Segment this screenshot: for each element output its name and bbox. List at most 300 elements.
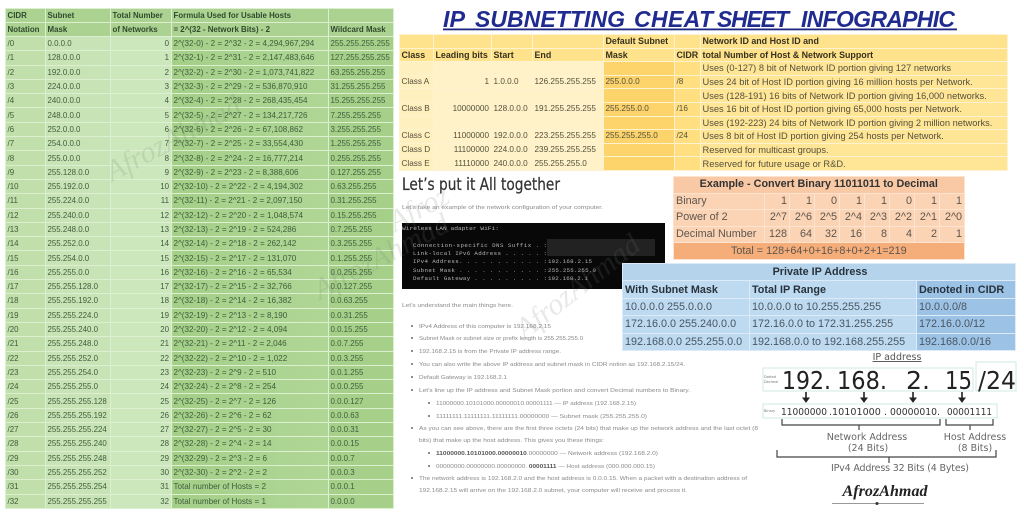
table: CIDR notation reference: Total Number — [112, 11, 163, 20]
table: CIDR notation reference: 0.0.63.255 — [330, 296, 368, 305]
table: CIDR notation reference: 31.255.255.255 — [330, 82, 385, 91]
table: CIDR notation reference: 8 — [165, 154, 169, 163]
table: CIDR notation reference: 3.255.255.255 — [330, 125, 381, 134]
table: CIDR notation reference: /9 — [8, 168, 14, 177]
table: binary to decimal example: Binary — [676, 195, 707, 207]
table: CIDR notation reference: 2^(32-8) - 2 = 2^24 - 2 = 16,777,214 — [174, 154, 303, 163]
table: CIDR notation reference: 0.31.255.255 — [330, 196, 377, 205]
table: binary to decimal example: 16 — [850, 228, 862, 240]
heading: Let’s put it All together — [402, 175, 560, 195]
table: CIDR notation reference: /25 — [8, 397, 18, 406]
table: CIDR notation reference: 0.0.0.0 — [330, 497, 355, 506]
table: IP address classes: Uses (192-223) 24 bits of Network ID portion giving 2 million networks. — [702, 118, 992, 128]
table: CIDR notation reference: /30 — [8, 468, 18, 477]
explanation list: Subnet Mask or subnet size or prefix length is 255.255.255.0 — [419, 336, 583, 342]
table: CIDR notation reference: /21 — [8, 339, 18, 348]
table: CIDR notation reference: of Networks — [112, 25, 158, 34]
table: CIDR notation reference: 0.0.7.255 — [330, 339, 363, 348]
table: CIDR notation reference: 15 — [160, 254, 169, 263]
table: binary to decimal example: 2^2 — [895, 211, 912, 223]
table: IP address classes: Class — [402, 50, 425, 60]
table: CIDR notation reference: 255.255.255.192 — [48, 411, 107, 420]
table: CIDR notation reference: 15.255.255.255 — [330, 96, 385, 105]
table: IP address classes: End — [534, 50, 551, 60]
table: IP address classes: Reserved for multicast groups. — [702, 145, 829, 155]
table: CIDR notation reference: Notation — [8, 25, 40, 34]
terminal: 192.168.2.1 — [548, 275, 589, 282]
table: binary to decimal example: 128 — [769, 228, 787, 240]
table: CIDR notation reference: 25 — [160, 397, 169, 406]
table: CIDR notation reference: /6 — [8, 125, 14, 134]
table: IP address classes: Uses 24 bit of Host ID portion giving 16 million hosts per Network. — [702, 77, 973, 87]
table: CIDR notation reference: 9 — [165, 168, 169, 177]
table: CIDR notation reference: 2^(32-28) - 2 = 2^4 - 2 = 14 — [174, 439, 272, 448]
explanation list: 11000000.10101000.00000010.00001111 — IP address (192.168.2.15) — [436, 401, 636, 407]
bracket labels: (24 Bits) — [848, 443, 888, 454]
table: IP address classes: /8 — [676, 77, 683, 86]
table: CIDR notation reference: 26 — [160, 411, 169, 420]
table: CIDR notation reference: 2^(32-11) - 2 = 2^21 - 2 = 2,097,150 — [174, 196, 302, 205]
table: binary to decimal example: 1 — [956, 195, 962, 207]
terminal: 192.168.2.15 — [548, 258, 593, 265]
table: IP address classes: Class B — [402, 104, 430, 113]
table: CIDR notation reference: 254.0.0.0 — [48, 139, 80, 148]
intro text: Let’s take an example of the network configuration of your computer. — [402, 205, 603, 211]
table: binary to decimal example: 1 — [781, 195, 787, 207]
table: CIDR notation reference: /8 — [8, 154, 14, 163]
table: binary to decimal example: Decimal Number — [676, 228, 756, 240]
table: CIDR notation reference: 255.255.254.0 — [48, 368, 98, 377]
explanation list: 11111111.11111111.11111111.00000000 — Subnet mask (255.255.255.0) — [436, 414, 647, 420]
table: binary to decimal example: Power of 2 — [676, 211, 728, 223]
explanation list: IPv4 Address of this computer is 192.168.2.15 — [419, 324, 551, 330]
table: CIDR notation reference: 2^(32-10) - 2 = 2^22 - 2 = 4,194,302 — [174, 182, 303, 191]
table: CIDR notation reference: 30 — [160, 468, 169, 477]
table: CIDR notation reference: 2^(32-9) - 2 = 2^23 - 2 = 8,388,606 — [174, 168, 299, 177]
binary IP row: 11000000 — [781, 407, 827, 418]
table: CIDR notation reference: 2^(32-0) - 2 = 2^32 - 2 = 4,294,967,294 — [174, 39, 314, 48]
table: CIDR notation reference: 0.0.0.127 — [330, 397, 363, 406]
table: CIDR notation reference: 1.255.255.255 — [330, 139, 381, 148]
table: CIDR notation reference: 255.255.248.0 — [48, 339, 98, 348]
table: CIDR notation reference: /24 — [8, 382, 18, 391]
table: private IP address: Private IP Address — [773, 266, 867, 278]
explanation list: 192.168.2.15 will arrive on the 192.168.2.0 subnet, your computer will receive and process it. — [419, 488, 687, 494]
table: private IP address: Total IP Range — [752, 284, 826, 296]
terminal: 255.255.255.0 — [548, 267, 597, 274]
table: binary to decimal example: 1 — [956, 228, 962, 240]
explanation list: 11000000.10101000.00000010 .00000000 — Network address (192.168.2.0) — [436, 451, 658, 457]
table: CIDR notation reference: 20 — [160, 325, 169, 334]
explanation list: You can also write the above IP address and subnet mask in CIDR notion as 192.168.2.15/24. — [419, 362, 685, 368]
table: IP address classes: 224.0.0.0 — [494, 145, 528, 154]
explanation list: bits) that make up the host address. This gives you these things: — [419, 438, 604, 444]
table: CIDR notation reference: 13 — [160, 225, 169, 234]
table: CIDR notation reference: 255.255.224.0 — [48, 311, 98, 320]
bracket labels — [827, 432, 1006, 474]
table: CIDR notation reference: 255.255.255.0 — [48, 382, 98, 391]
table: CIDR notation reference: 32 — [160, 497, 169, 506]
decimal IP row — [763, 352, 1016, 395]
table: CIDR notation reference: 255.192.0.0 — [48, 182, 89, 191]
table: CIDR notation reference: /5 — [8, 111, 14, 120]
table: CIDR notation reference: 252.0.0.0 — [48, 125, 80, 134]
table: private IP address: 192.168.0.0 255.255.0.0 — [625, 336, 742, 348]
table: CIDR notation reference: 7.255.255.255 — [330, 111, 381, 120]
table: IP address classes: Network ID and Host ID and — [702, 36, 819, 46]
table: CIDR notation reference: 21 — [160, 339, 169, 348]
arrows — [803, 392, 965, 402]
table: IP address classes: 11100000 — [454, 145, 489, 154]
table: CIDR notation reference: /29 — [8, 454, 18, 463]
table: CIDR notation reference: 0.127.255.255 — [330, 168, 381, 177]
table: binary to decimal example: 64 — [800, 228, 812, 240]
table: IP address classes: Leading bits — [436, 50, 488, 60]
table: IP address classes: 126.255.255.255 — [534, 77, 596, 86]
table: CIDR notation reference: 27 — [160, 425, 169, 434]
table: binary to decimal example: 32 — [825, 228, 837, 240]
table: CIDR notation reference: /11 — [8, 196, 18, 205]
table: CIDR notation reference: /27 — [8, 425, 18, 434]
table: private IP address: Denoted in CIDR — [919, 284, 1004, 296]
table: binary to decimal example: 2 — [931, 228, 937, 240]
table: binary to decimal example: 0 — [906, 195, 912, 207]
table: binary to decimal example: 2^3 — [870, 211, 887, 223]
table: CIDR notation reference: 255.248.0.0 — [48, 225, 89, 234]
binary IP row: .10101000 . — [829, 407, 887, 418]
table: CIDR notation reference: 0.15.255.255 — [330, 211, 377, 220]
table: CIDR notation reference: 11 — [161, 196, 169, 205]
table: CIDR notation reference: 255.255.255.240 — [48, 439, 107, 448]
table: CIDR notation reference: 255.255.255.252 — [48, 468, 107, 477]
title: IP — [443, 6, 466, 32]
table: binary to decimal example: 2^7 — [770, 211, 787, 223]
table: CIDR notation reference: 22 — [160, 354, 169, 363]
table: CIDR notation reference: 2^(32-7) - 2 = 2^25 - 2 = 33,554,430 — [174, 139, 303, 148]
table: CIDR notation reference: /0 — [8, 39, 14, 48]
table: IP address classes: 255.255.255.0 — [606, 131, 658, 140]
table: CIDR notation reference: 0.7.255.255 — [330, 225, 372, 234]
table: CIDR notation reference: 255.254.0.0 — [48, 254, 89, 263]
table: CIDR notation reference: 192.0.0.0 — [48, 68, 80, 77]
terminal: Subnet Mask . . . . . . . . . . . : — [413, 267, 547, 274]
explanation list: Let’s understand the main things here. — [402, 303, 513, 309]
table: IP address classes: 239.255.255.255 — [534, 145, 596, 154]
table: CIDR notation reference: 224.0.0.0 — [48, 82, 80, 91]
table: CIDR notation reference: 0.1.255.255 — [330, 254, 372, 263]
title — [443, 6, 957, 32]
table: binary to decimal example: 2^0 — [945, 211, 962, 223]
table: CIDR notation reference: 2^(32-1) - 2 = 2^31 - 2 = 2,147,483,646 — [174, 53, 314, 62]
table: CIDR notation reference: 3 — [165, 82, 169, 91]
terminal — [402, 223, 665, 289]
table: CIDR notation reference: 2^(32-14) - 2 = 2^18 - 2 = 262,142 — [174, 239, 296, 248]
table: CIDR notation reference: 2^(32-2) - 2 = 2^30 - 2 = 1,073,741,822 — [174, 68, 314, 77]
table: CIDR notation reference: /26 — [8, 411, 18, 420]
table: CIDR notation reference: 255.240.0.0 — [48, 211, 89, 220]
explanation list: Default Gateway is 192.168.2.1 — [419, 375, 507, 381]
decimal IP row: 192. — [782, 366, 831, 395]
table: CIDR notation reference: /13 — [8, 225, 18, 234]
bracket labels: (8 Bits) — [958, 443, 992, 454]
table: binary to decimal example: 2^5 — [820, 211, 837, 223]
table: private IP address: 172.16.0.0 to 172.31.255.255 — [752, 318, 893, 330]
table: CIDR notation reference: 255.252.0.0 — [48, 239, 89, 248]
table: IP address classes: 11110000 — [454, 159, 489, 168]
table: CIDR notation reference: 28 — [160, 439, 169, 448]
table: IP address classes: 223.255.255.255 — [534, 131, 596, 140]
title: CHEAT — [634, 6, 715, 32]
table: private IP address: 172.16.0.0/12 — [919, 318, 985, 330]
table: IP address classes: Class D — [402, 145, 430, 154]
table: CIDR notation reference: 0.0.0.3 — [330, 468, 355, 477]
table: CIDR notation reference: 0.0.0.7 — [330, 454, 355, 463]
table: IP address classes: 1.0.0.0 — [494, 77, 519, 86]
table: CIDR notation reference: 2^(32-26) - 2 = 2^6 - 2 = 62 — [174, 411, 272, 420]
table: CIDR notation reference: 29 — [160, 454, 169, 463]
decimal IP row: Dotted — [764, 375, 776, 379]
table: binary to decimal example: 0 — [831, 195, 837, 207]
table: IP address classes: Mask — [606, 50, 628, 60]
table: CIDR notation reference: 24 — [160, 382, 169, 391]
table: CIDR notation reference: 255.255.255.128 — [48, 397, 107, 406]
table: CIDR notation reference: 2^(32-22) - 2 = 2^10 - 2 = 1,022 — [174, 354, 287, 363]
table: CIDR notation reference: 0.0.0.0 — [48, 39, 72, 48]
title: SHEET — [717, 6, 791, 32]
table: CIDR notation reference: Wildcard Mask — [330, 25, 386, 34]
table: IP address classes: Uses 16 bit of Host ID portion giving 65,000 hosts per Network. — [702, 104, 962, 114]
table: IP address classes: Class E — [402, 159, 430, 168]
decimal IP row: 168. — [837, 366, 887, 395]
table: private IP address: 192.168.0.0 to 192.168.255.255 — [752, 336, 905, 348]
table: binary to decimal example: 8 — [881, 228, 887, 240]
table: CIDR notation reference: /20 — [8, 325, 18, 334]
table: CIDR notation reference: 0.0.255.255 — [330, 268, 372, 277]
bracket labels: Host Address — [944, 432, 1006, 443]
table: CIDR notation reference: 0.255.255.255 — [330, 154, 381, 163]
brackets — [777, 419, 996, 463]
table: CIDR notation reference: 2^(32-4) - 2 = 2^28 - 2 = 268,435,454 — [174, 96, 308, 105]
table: CIDR notation reference: 255.255.128.0 — [48, 282, 98, 291]
table: CIDR notation reference: 2^(32-17) - 2 = 2^15 - 2 = 32,766 — [174, 282, 292, 291]
table: IP address classes: 255.0.0.0 — [606, 77, 640, 86]
table: CIDR notation reference: 255.0.0.0 — [48, 154, 80, 163]
table: IP address classes: 191.255.255.255 — [534, 104, 596, 113]
table: CIDR notation reference: 2 — [165, 68, 169, 77]
table: CIDR notation reference: /4 — [8, 96, 14, 105]
table: CIDR notation reference: 14 — [160, 239, 169, 248]
table: binary to decimal example: 4 — [906, 228, 912, 240]
table: CIDR notation reference: 5 — [165, 111, 169, 120]
watermarks: AfrozAhmad — [306, 207, 456, 307]
table: CIDR notation reference: 0.0.0.255 — [330, 382, 363, 391]
table: CIDR notation reference: 2^(32-18) - 2 = 2^14 - 2 = 16,382 — [174, 296, 292, 305]
table: CIDR notation reference: /23 — [8, 368, 18, 377]
table: CIDR notation reference: 240.0.0.0 — [48, 96, 80, 105]
table: CIDR notation reference: /15 — [8, 254, 18, 263]
table: CIDR notation reference: 18 — [160, 296, 169, 305]
table: private IP address: With Subnet Mask — [625, 284, 718, 296]
table: IP address classes: /24 — [676, 131, 688, 140]
table: IP address classes: 255.255.255.0 — [534, 159, 587, 168]
table: CIDR notation reference: 2^(32-25) - 2 = 2^7 - 2 = 126 — [174, 397, 276, 406]
table: CIDR notation reference: 0.0.3.255 — [330, 354, 363, 363]
table: IP address classes: /16 — [676, 104, 688, 113]
table: IP address classes: Class A — [402, 77, 429, 86]
table: IP address classes: 10000000 — [453, 104, 489, 113]
table: CIDR notation reference: 2^(32-16) - 2 = 2^16 - 2 = 65,534 — [174, 268, 292, 277]
table: CIDR notation reference: /3 — [8, 82, 14, 91]
table: IP address classes: 255.255.0.0 — [606, 104, 649, 113]
table: binary to decimal example: 2^4 — [845, 211, 862, 223]
table: IP address classes: Uses 8 bit of Host ID portion giving 254 hosts per Network. — [702, 131, 944, 141]
table: CIDR notation reference: 0.0.0.31 — [330, 425, 359, 434]
decimal IP row: 2. — [906, 366, 930, 395]
table: IP address classes: 1 — [484, 77, 489, 86]
table: CIDR notation reference: 0.0.0.1 — [330, 482, 355, 491]
table: CIDR notation reference: 17 — [160, 282, 169, 291]
explanation list: Let’s line up the IP address and Subnet Mask portion and convert Decimal numbers to Binary. — [419, 388, 690, 394]
table: CIDR notation reference: 127.255.255.255 — [330, 53, 390, 62]
table: CIDR notation reference: 255.255.255.254 — [48, 482, 107, 491]
table: IP address classes: 192.0.0.0 — [494, 131, 528, 140]
table: CIDR notation reference: 2^(32-29) - 2 = 2^3 - 2 = 6 — [174, 454, 267, 463]
table: IP address classes — [399, 34, 1008, 171]
table: CIDR notation reference: 255.255.192.0 — [48, 296, 98, 305]
table: CIDR notation reference: CIDR — [8, 11, 27, 20]
table: CIDR notation reference: 128.0.0.0 — [48, 53, 80, 62]
table: binary to decimal example: Total = 128+64+0+16+8+0+2+1=219 — [731, 245, 907, 257]
table: IP address classes: 128.0.0.0 — [494, 104, 528, 113]
table: CIDR notation reference: 2^(32-15) - 2 = 2^17 - 2 = 131,070 — [174, 254, 296, 263]
table: CIDR notation reference: 19 — [160, 311, 169, 320]
table: CIDR notation reference: 0 — [165, 39, 169, 48]
table: CIDR notation reference: 255.255.255.248 — [48, 454, 107, 463]
table: CIDR notation reference: 0.0.127.255 — [330, 282, 372, 291]
table: CIDR notation reference: /19 — [8, 311, 18, 320]
bracket labels: IPv4 Address 32 Bits (4 Bytes) — [831, 463, 969, 474]
decimal IP row: 15 — [945, 366, 972, 395]
table: CIDR notation reference: 0.0.15.255 — [330, 325, 368, 334]
table: CIDR notation reference: Subnet — [48, 11, 74, 20]
terminal: Connection-specific DNS Suffix . : — [413, 242, 547, 249]
table: CIDR notation reference: /10 — [8, 182, 18, 191]
explanation list: As you can see above, there are the first three octets (24 bits) that make up the network address and the last octet (8 — [419, 426, 758, 432]
watermarks: Afroz — [381, 179, 455, 239]
table: CIDR notation reference: 2^(32-27) - 2 = 2^5 - 2 = 30 — [174, 425, 272, 434]
table: CIDR notation reference: /1 — [8, 53, 14, 62]
table: IP address classes: total Number of Host & Network Support — [702, 50, 873, 60]
table: CIDR notation reference: 16 — [160, 268, 169, 277]
title: SUBNETTING — [475, 6, 625, 32]
table: IP address classes: Uses (0-127) 8 bit of Network ID portion giving 127 networks — [702, 63, 951, 73]
table: CIDR notation reference: 255.255.0.0 — [48, 268, 89, 277]
table: IP address classes: 11000000 — [453, 131, 489, 140]
table: CIDR notation reference: 31 — [160, 482, 169, 491]
explanation list — [402, 303, 758, 494]
binary IP row: Binary — [764, 409, 775, 413]
table: private IP address: 10.0.0.0 255.0.0.0 — [625, 301, 712, 313]
table: private IP address: 10.0.0.0/8 — [919, 301, 967, 313]
table: CIDR notation reference: 0.0.0.15 — [330, 439, 359, 448]
table: binary to decimal example: 1 — [931, 195, 937, 207]
table: CIDR notation reference: 0.3.255.255 — [330, 239, 372, 248]
table: CIDR notation reference: 10 — [160, 182, 169, 191]
table: CIDR notation reference: 0.0.31.255 — [330, 311, 368, 320]
table: private IP address: 10.0.0.0 to 10.255.255.255 — [752, 301, 881, 313]
title: INFOGRAPHIC — [801, 6, 955, 32]
table: CIDR notation reference: 255.128.0.0 — [48, 168, 89, 177]
terminal: Wireless LAN adapter WiFi: — [402, 225, 499, 232]
table: CIDR notation reference: 12 — [160, 211, 169, 220]
terminal: Link-local IPv6 Address . . . . . : — [413, 250, 547, 257]
table: binary to decimal example: Example - Convert Binary 11011011 to Decimal — [700, 178, 938, 190]
explanation list: 00000000.00000000.00000000. 00001111 — Host address (000.000.000.15) — [436, 464, 655, 470]
decimal IP row: /24 — [978, 366, 1016, 395]
table: CIDR notation reference: Mask — [48, 25, 67, 34]
table: CIDR notation reference: 0.63.255.255 — [330, 182, 377, 191]
watermarks: AfrozAhmad — [507, 227, 647, 347]
table: CIDR notation reference: 0.0.0.63 — [330, 411, 359, 420]
table: CIDR notation reference: 1 — [165, 53, 169, 62]
table: CIDR notation reference: 4 — [165, 96, 169, 105]
table: CIDR notation reference: /16 — [8, 268, 18, 277]
table: CIDR notation reference: Formula Used for Usable Hosts — [174, 11, 291, 20]
table: CIDR notation reference: 2^(32-20) - 2 = 2^12 - 2 = 4,094 — [174, 325, 287, 334]
table: CIDR notation reference: 255.255.240.0 — [48, 325, 98, 334]
table: private IP address: 192.168.0.0/16 — [919, 336, 991, 348]
terminal: IPv4 Address. . . . . . . . . . . : — [413, 258, 547, 265]
table: CIDR notation reference: = 2^(32 - Network Bits) - 2 — [174, 25, 270, 34]
decimal IP row: Decimal — [764, 380, 778, 384]
table: CIDR notation reference: 2^(32-6) - 2 = 2^26 - 2 = 67,108,862 — [174, 125, 303, 134]
table: CIDR notation reference: /18 — [8, 296, 18, 305]
table: IP address classes: Uses (128-191) 16 bits of Network ID portion giving 16,000 networks. — [702, 91, 987, 101]
table: binary to decimal example: 2^6 — [795, 211, 812, 223]
logo: AfrozAhmad — [842, 483, 928, 500]
table: private IP address — [622, 263, 1016, 351]
table: IP address classes: Default Subnet — [606, 36, 668, 46]
table: CIDR notation reference: /12 — [8, 211, 18, 220]
table: CIDR notation reference: 6 — [165, 125, 169, 134]
binary IP row: 00000010. — [890, 407, 940, 418]
table: CIDR notation reference: /32 — [8, 497, 18, 506]
table: binary to decimal example — [673, 176, 965, 260]
table: CIDR notation reference: /28 — [8, 439, 18, 448]
table: CIDR notation reference: 255.224.0.0 — [48, 196, 89, 205]
watermarks: AfrozAhmad — [98, 89, 248, 189]
table: CIDR notation reference: /17 — [8, 282, 18, 291]
bracket labels: Network Address — [827, 432, 907, 443]
table: CIDR notation reference: 23 — [160, 368, 169, 377]
table: CIDR notation reference: /2 — [8, 68, 14, 77]
table: CIDR notation reference: 2^(32-13) - 2 = 2^19 - 2 = 524,286 — [174, 225, 296, 234]
table: CIDR notation reference: 2^(32-12) - 2 = 2^20 - 2 = 1,048,574 — [174, 211, 303, 220]
table: IP address classes: Reserved for future usage or R&D. — [702, 159, 846, 169]
table: IP address classes: Class C — [402, 131, 430, 140]
table: binary to decimal example: 1 — [856, 195, 862, 207]
table: binary to decimal example: 1 — [806, 195, 812, 207]
table: CIDR notation reference: Total number of Hosts = 2 — [174, 482, 266, 491]
table: IP address classes: Start — [494, 50, 514, 60]
table: CIDR notation reference: 2^(32-30) - 2 = 2^2 - 2 = 2 — [174, 468, 267, 477]
binary IP row — [763, 404, 997, 418]
table: CIDR notation reference: 2^(32-19) - 2 = 2^13 - 2 = 8,190 — [174, 311, 287, 320]
explanation list: The network address is 192.168.2.0 and the host address is 0.0.0.15. When a packet with a destination address of — [419, 476, 747, 482]
table: CIDR notation reference: 248.0.0.0 — [48, 111, 80, 120]
table: CIDR notation reference: 2^(32-23) - 2 = 2^9 - 2 = 510 — [174, 368, 276, 377]
table: CIDR notation reference: 2^(32-3) - 2 = 2^29 - 2 = 536,870,910 — [174, 82, 308, 91]
